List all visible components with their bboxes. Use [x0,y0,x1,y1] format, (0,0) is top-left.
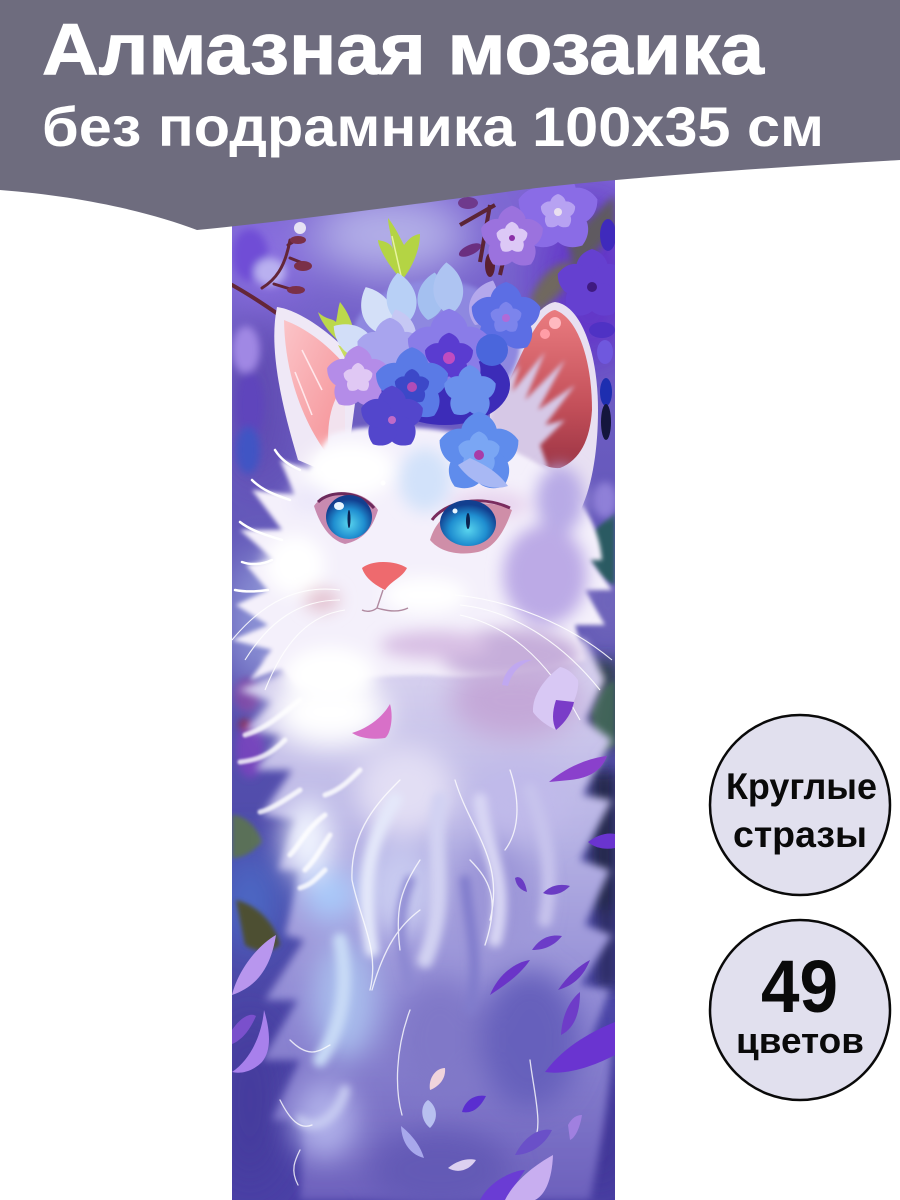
leaves on the crown [318,218,420,358]
falling petals [232,660,615,1200]
badge: round rhinestones [710,715,890,895]
right eye [430,500,512,554]
left ear [274,307,355,466]
background wisteria blossoms [232,195,617,778]
subtitle: без подрамника 100х35 см [42,95,824,158]
branch and buds top left [232,222,312,317]
badge: round rhinestones: Круглые [726,766,877,807]
cat head [232,427,612,703]
badge: 49 colours: цветов [736,1020,864,1061]
badge: round rhinestones: стразы [733,814,867,855]
flower crown [323,261,545,453]
forehead sparkles [364,465,386,486]
flowers top right [458,184,615,440]
cat body [238,640,612,1200]
blue flower on forehead [440,412,518,488]
painting: white cat with flowers [220,171,640,1200]
dark foliage at picture edges [232,512,618,990]
title: Алмазная мозаика [42,10,765,90]
broad flowing locks [300,790,549,1125]
right ear [490,302,598,515]
head fur tufts [235,450,300,592]
whiskers [232,589,612,720]
left eye [314,492,378,544]
nose and mouth [362,562,408,611]
badge: 49 colours: 49 [761,945,838,1028]
fur strokes on body [240,700,538,1185]
painting background [220,180,640,1200]
header banner [0,0,900,230]
badge: 49 colours [710,920,890,1100]
